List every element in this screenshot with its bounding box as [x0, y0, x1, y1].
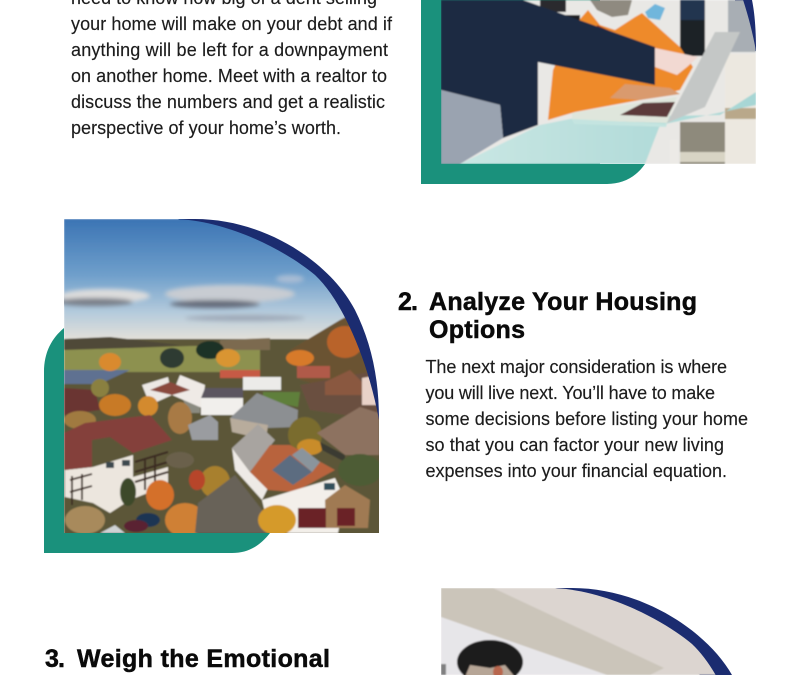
- photo: realtor and client at laptop: [441, 0, 756, 164]
- section 3 heading: Weigh the Emotional: [77, 645, 330, 673]
- section 1 body text: anything will be left for a downpayment: [71, 40, 388, 60]
- section 2 heading: Options: [429, 316, 525, 344]
- barn: [230, 393, 298, 428]
- section 2 heading: 2.: [398, 288, 418, 316]
- solar house: [232, 424, 275, 472]
- section 2 body text: so that you can factor your new living: [426, 435, 724, 455]
- section 1 body text: on another home. Meet with a realtor to: [71, 66, 387, 86]
- navy arc accent: [555, 588, 732, 675]
- section 1 body text: [71, 0, 393, 138]
- section 2 heading: Analyze Your Housing: [429, 288, 697, 316]
- section 1 body text: discuss the numbers and get a realistic: [71, 92, 385, 112]
- section 2 heading: [398, 288, 697, 344]
- teal backing shape: [421, 0, 645, 184]
- image panel: village aerial: [44, 219, 384, 553]
- half timbered house: [65, 455, 168, 513]
- trees and cars: [146, 480, 174, 510]
- section 2 body text: you will live next. You’ll have to make: [426, 383, 715, 403]
- photo: man in bright room: [441, 588, 716, 675]
- image panel: meeting with a realtor: [421, 0, 756, 184]
- section 3 heading: 3.: [45, 645, 65, 673]
- section 1 body text: your home will make on your debt and if: [71, 14, 393, 34]
- small houses: [142, 377, 172, 405]
- section 2 body text: some decisions before listing your home: [426, 409, 748, 429]
- section 1 body text: perspective of your home’s worth.: [71, 118, 341, 138]
- photo: autumn village: [57, 219, 384, 539]
- navy arc accent: [735, 0, 756, 51]
- section 2 body text: expenses into your financial equation.: [426, 461, 727, 481]
- navy arc accent: [178, 219, 379, 430]
- section 2 body text: [426, 357, 748, 481]
- image panel: man at home: [441, 588, 756, 675]
- teal backing shape: [44, 328, 270, 553]
- section 2 body text: The next major consideration is where: [426, 357, 727, 377]
